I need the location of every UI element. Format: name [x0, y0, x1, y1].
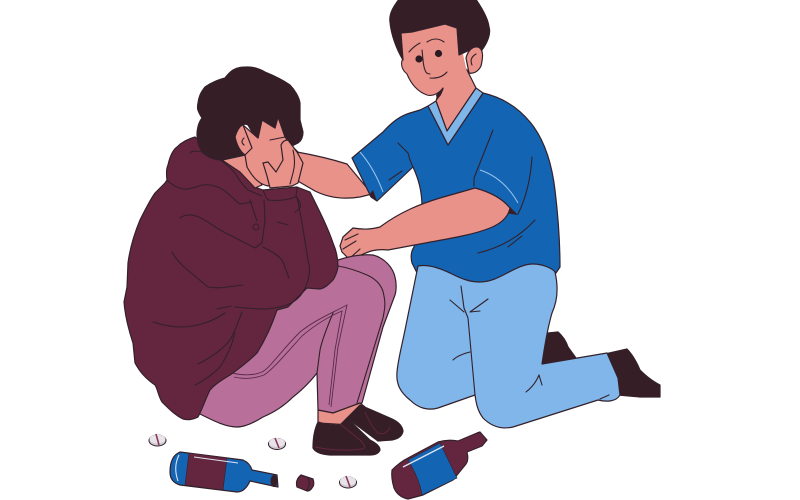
figure: seated distressed person [124, 67, 403, 455]
man's shirt collar [428, 88, 483, 145]
icon: pill left [149, 434, 166, 446]
person's trousers [198, 255, 396, 427]
icon: fallen bottle right [392, 432, 487, 499]
person's neck and face [222, 117, 298, 188]
icon: pill centre [268, 438, 286, 450]
icon: man's rear shoe [540, 332, 576, 365]
icon: fallen bottle left [170, 452, 278, 492]
man's near arm and hand [340, 188, 510, 260]
man's facial features [409, 39, 447, 78]
man's ear [466, 47, 483, 73]
man's trousers [397, 264, 620, 428]
man's neck and face [401, 24, 476, 131]
man's hair [390, 0, 490, 60]
person's finger lines [290, 150, 294, 184]
man's shirt [352, 93, 560, 290]
person's hoodie [124, 137, 338, 420]
icon: man's front shoe [605, 349, 660, 397]
man's far arm [296, 152, 372, 198]
icon: pill right [340, 476, 356, 488]
person's hand on face [263, 140, 303, 188]
person's shoes and socks [313, 403, 403, 455]
figure: kneeling man [296, 0, 660, 428]
icon: bottle cap [296, 475, 314, 491]
person's hair [197, 67, 303, 160]
